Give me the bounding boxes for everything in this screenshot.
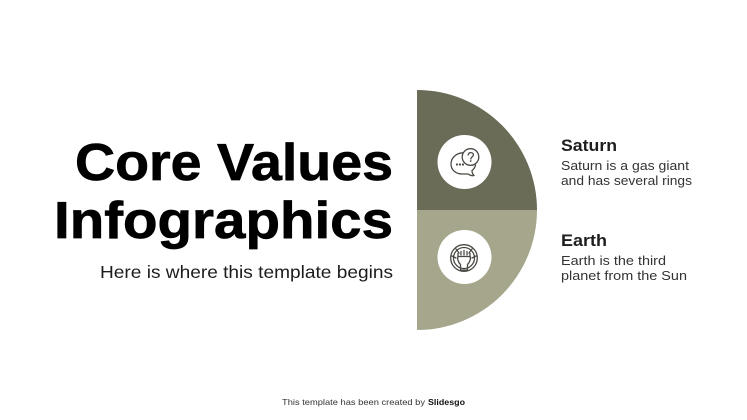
icon: speech bubble with question mark	[438, 135, 492, 189]
footer credit: This template has been created by	[282, 397, 426, 407]
description: Earth: Earth is the third	[561, 253, 666, 268]
icon: hand inside globe circle	[438, 230, 492, 284]
title	[54, 134, 393, 250]
heading: Saturn: Saturn	[561, 136, 617, 155]
description: Saturn: Saturn is a gas giant	[561, 158, 689, 173]
segment: Saturn	[417, 90, 537, 210]
text block: Earth	[561, 231, 687, 283]
segment: Earth	[417, 210, 537, 330]
footer credit: Slidesgo	[428, 397, 465, 407]
description: Earth	[561, 253, 687, 283]
description: Saturn: and has several rings	[561, 173, 693, 188]
title: Core Values	[75, 134, 393, 192]
description: Earth: planet from the Sun	[561, 268, 687, 283]
subtitle: Here is where this template begins	[100, 262, 393, 282]
semicircle chart	[417, 90, 537, 330]
text block: Saturn	[561, 136, 693, 188]
heading: Earth: Earth	[561, 231, 607, 250]
title: Infographics	[54, 192, 393, 250]
description: Saturn	[561, 158, 693, 188]
